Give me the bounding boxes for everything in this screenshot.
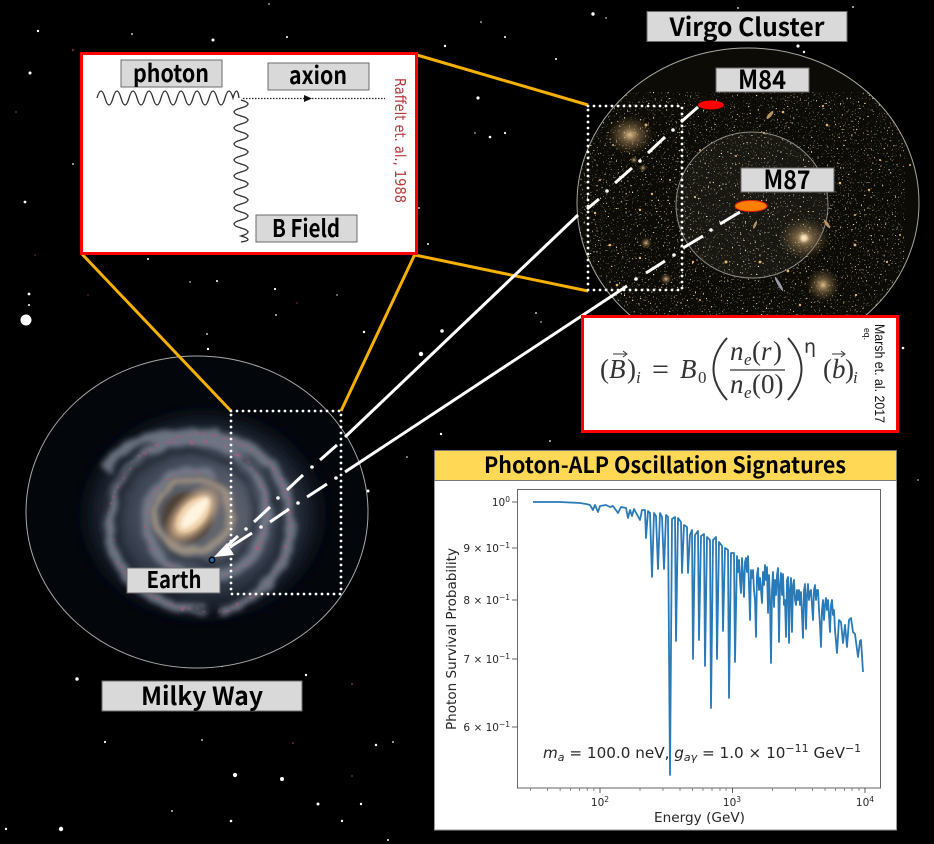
label: axion (268, 56, 369, 91)
x tick labels: 10 (723, 797, 736, 809)
wavy line: B field (234, 100, 248, 242)
equation: b (832, 354, 846, 384)
equation: n (730, 336, 744, 366)
equation: r (761, 336, 772, 366)
label: Milky Way: Milky Way (141, 677, 264, 713)
chart annotation: = 100.0 neV, (565, 744, 674, 762)
label: M87 (741, 160, 834, 197)
y tick labels: −1 (499, 593, 510, 602)
equation: B (680, 354, 696, 384)
galactic core (150, 471, 236, 559)
y tick labels: −1 (499, 720, 510, 729)
panel: Milky Way galaxy (26, 356, 368, 668)
label: axion: axion (289, 56, 347, 91)
equation: n (730, 369, 744, 399)
equation: i (853, 368, 858, 387)
y tick labels: 7 × 10 (463, 654, 499, 666)
selection box: Milky Way region (231, 411, 341, 594)
label: photon: photon (133, 54, 209, 89)
inner ring (155, 479, 231, 551)
galaxy glow (77, 407, 329, 623)
label: M84 (716, 60, 809, 97)
photon path: M87 to Earth (230, 212, 740, 547)
chart annotation: aγ (684, 751, 698, 764)
y tick labels (463, 495, 510, 734)
survival probability curve (533, 502, 863, 775)
label: B Field: B Field (272, 209, 340, 244)
equation: ( (823, 354, 832, 384)
label: M87: M87 (764, 160, 810, 197)
dark dust lanes (103, 452, 280, 610)
equation: = (652, 353, 669, 386)
chart annotation: m (543, 744, 558, 762)
y tick labels: −1 (499, 652, 510, 661)
equation: e (744, 383, 752, 402)
equation: ) (773, 336, 782, 366)
plot axes (512, 490, 880, 793)
x tick labels (591, 795, 874, 809)
y axis label: Photon Survival Probability (445, 548, 460, 730)
M84 marker (698, 100, 724, 110)
photon path: M84 to Earth (225, 107, 698, 548)
y tick labels: 6 × 10 (463, 722, 499, 734)
chart annotation: = 1.0 × 10 (697, 744, 785, 762)
citation: Marsh: Marsh et. al. 2017 (872, 324, 888, 423)
chart background (434, 480, 896, 830)
panel: magnetic field equation (582, 316, 898, 432)
connector lines: zoom from Milky Way to Virgo (81, 55, 588, 411)
x tick labels: 4 (869, 795, 874, 804)
M87 marker (735, 200, 767, 212)
chart title: Photon-ALP Oscillation Signatures (484, 448, 846, 480)
y tick labels: −1 (499, 541, 510, 550)
galaxies (606, 110, 840, 302)
y tick labels: 0 (505, 495, 510, 504)
x tick labels: 2 (604, 795, 609, 804)
chart annotation: a (558, 751, 565, 764)
panel: oscillation signature chart (434, 448, 896, 830)
cluster star speckle (580, 92, 905, 315)
x axis label: Energy (GeV) (654, 811, 745, 826)
chart annotation: −11 (785, 742, 809, 755)
equation: ) (845, 354, 854, 384)
dotted line: axion (243, 98, 385, 100)
y tick labels: 8 × 10 (463, 595, 499, 607)
wavy line: photon (97, 91, 239, 105)
panel: Virgo Cluster (576, 48, 920, 315)
arrow on axion line (304, 95, 312, 102)
equation: ) (627, 354, 636, 384)
equation: ( (600, 354, 609, 384)
spiral arms (105, 434, 290, 612)
star-forming regions (110, 434, 290, 612)
chart annotation: −1 (845, 742, 861, 755)
label: Milky Way (102, 677, 302, 713)
x tick labels: 10 (591, 797, 604, 809)
citation: Raffelt: Raffelt et. al., 1988 (391, 78, 409, 203)
citation: eq: eq. (862, 328, 872, 340)
chart annotation: g (674, 744, 684, 762)
label: Earth (127, 561, 220, 595)
equation: i (636, 368, 641, 387)
label: Earth: Earth (146, 561, 202, 595)
label: M84: M84 (738, 60, 786, 97)
chart annotation: GeV (809, 744, 846, 762)
label: Virgo Cluster: Virgo Cluster (669, 8, 825, 44)
equation: 0 (698, 368, 706, 387)
arrowhead (214, 543, 234, 557)
x tick labels: 3 (736, 795, 741, 804)
y tick labels: 9 × 10 (463, 543, 499, 555)
brighter cluster stars (594, 105, 911, 319)
equation: η (804, 336, 816, 358)
panel: Feynman diagram (82, 54, 416, 254)
equation (600, 336, 858, 402)
Earth marker (209, 557, 215, 563)
y tick labels: 10 (492, 497, 505, 509)
x tick labels: 10 (856, 797, 869, 809)
inner circle (676, 132, 828, 278)
selection box: Virgo Cluster region (588, 106, 682, 290)
equation: B (609, 354, 626, 384)
equation: (0) (752, 369, 783, 399)
equation: e (744, 350, 752, 369)
equation: ( (752, 336, 761, 366)
